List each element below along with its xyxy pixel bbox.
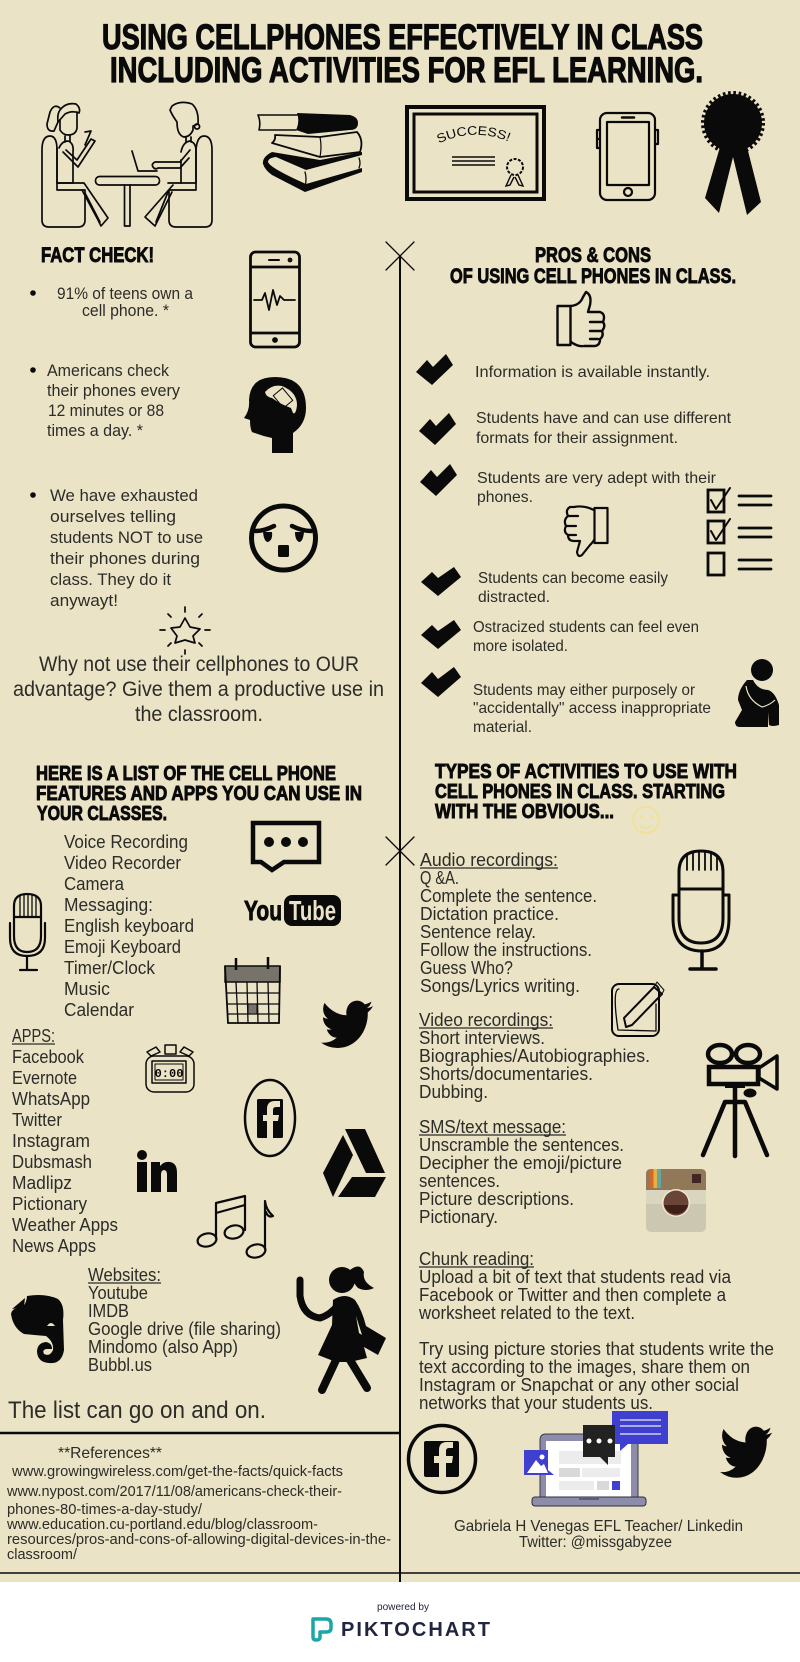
heading: pros and cons: PROS & CONS [535,244,651,267]
text: features list: Calendar [64,1000,134,1020]
text: apps list [12,1026,118,1256]
text: audio recordings: Sentence relay. [420,922,536,942]
text: picture stories [419,1339,774,1413]
text: picture stories: Try using picture stories that students write the [419,1339,774,1359]
text: references: resources/pros-and-cons-of-allowing-digital-devices-in-the- [7,1531,391,1548]
heading: activities: CELL PHONES IN CLASS. STARTING [435,781,725,803]
text: sms activities: Decipher the emoji/picture [419,1153,622,1173]
heading: feature list [36,763,362,825]
icon: calendar sketch [225,957,280,1023]
icon: twitter bird [321,1001,373,1048]
fact: teens own phones: 91% of teens own a [57,284,193,303]
callout: why not use [13,653,384,726]
heading: feature list: FEATURES AND APPS YOU CAN USE IN [36,783,362,805]
text: sms activities: Pictionary. [419,1207,498,1227]
text: websites list: Websites: [88,1265,161,1285]
text: apps list: Twitter [12,1110,62,1130]
text: sms activities: sentences. [419,1171,500,1191]
icon: phone with pulse [250,252,300,347]
icon: small microphone [10,894,45,970]
text: features list: Timer/Clock [64,958,156,978]
icon: google drive [323,1129,386,1197]
footer: powered by piktochart [313,1602,490,1641]
text: chunk reading: worksheet related to the text. [418,1303,635,1323]
text: audio recordings: Guess Who? [420,958,513,978]
fact: exhausted: anywayt! [50,591,118,610]
text: apps list: WhatsApp [12,1089,90,1109]
text: cons list: Students may either purposely or [473,682,696,699]
heading: activities [435,761,737,823]
icon: shining star [160,607,210,654]
icon: head with phone [244,377,306,453]
text: references: www.growingwireless.com/get-the-facts/quick-facts [11,1463,343,1480]
fact: exhausted: ourselves telling [50,507,176,526]
title [102,18,703,90]
icon: instagram camera [646,1169,706,1232]
text: sms activities: Unscramble the sentences. [419,1135,624,1155]
icon: laptop with chat bubbles [524,1411,668,1506]
icon: youtube logo [244,895,341,926]
callout: why not use: the classroom. [135,703,263,726]
text: apps list: APPS: [12,1026,55,1046]
text: audio recordings: Audio recordings: [420,850,558,870]
text: the list can go on: The list can go on and on. [8,1397,266,1424]
fact: exhausted: their phones during [50,549,200,568]
text: cons list: Ostracized students can feel even [473,619,699,636]
text: features list: Voice Recording [64,832,188,852]
icon: twitter bird bottom [720,1427,772,1478]
icon: success certificate: SUCCESS! [437,126,510,142]
icon: award ribbon [703,93,763,215]
fact: exhausted: class. They do it [50,570,171,589]
icon: large microphone [673,851,729,969]
text: chunk reading: Chunk reading: [419,1249,534,1269]
text: cons list: distracted. [478,589,550,606]
text: pros list: Students have and can use different [476,410,732,427]
text: apps list: Dubsmash [12,1152,92,1172]
footer: powered by piktochart: PIKTOCHART [341,1619,490,1641]
icon: crossed lines top [386,242,414,270]
text: references: phones-80-times-a-day-study/ [7,1501,203,1518]
icon: notepad and pencil [612,982,664,1036]
heading: feature list: HERE IS A LIST OF THE CELL PHONE [36,763,336,785]
text: audio recordings: Q &A. [420,868,459,888]
fact: teens own phones [30,284,193,320]
icon: faint yellow smiley [633,807,659,833]
text: sms activities [419,1117,624,1227]
text: pros list: Information is available instantly. [475,364,710,381]
text: video recordings: Shorts/documentaries. [419,1064,593,1084]
text: author credit [454,1518,743,1551]
footer: powered by piktochart: powered by [377,1602,429,1613]
text: author credit: Gabriela H Venegas EFL Teacher/ Linkedin [454,1518,743,1535]
text: features list: Music [64,979,110,999]
text: apps list: News Apps [12,1236,96,1256]
icon: youtube logo: You [244,895,282,926]
fact: exhausted: We have exhausted [50,486,198,505]
icon: two people at a table [42,102,212,227]
text: audio recordings: Songs/Lyrics writing. [420,976,580,996]
icon: timer: 0:00 [155,1067,183,1081]
text: chunk reading: Upload a bit of text that students read via [419,1267,732,1287]
icon: check marks [416,354,461,697]
text: cons list: material. [473,719,532,736]
text: apps list: Evernote [12,1068,77,1088]
fact: exhausted [30,486,203,610]
text: references: **References** [58,1445,162,1462]
text: websites list: Bubbl.us [88,1355,152,1375]
fact: americans check: their phones every [47,381,180,400]
text: features list: English keyboard [64,916,194,936]
text: pros list: formats for their assignment. [476,430,678,447]
text: apps list: Weather Apps [12,1215,118,1235]
heading: activities: TYPES OF ACTIVITIES TO USE WITH [435,761,737,783]
icon: chat bubble [253,823,319,870]
text: websites list [88,1265,281,1375]
text: sms activities: SMS/text message: [419,1117,566,1137]
icon: evernote elephant [11,1295,64,1363]
text: features list: Messaging: [64,895,153,915]
heading: activities: WITH THE OBVIOUS... [435,801,614,823]
text: websites list: Mindomo (also App) [88,1337,238,1357]
text: cons list [473,570,711,736]
text: picture stories: Instagram or Snapchat or any other social [419,1375,739,1395]
text: chunk reading: Facebook or Twitter and then complete a [419,1285,727,1305]
heading: feature list: YOUR CLASSES. [37,803,167,825]
icon: tired emoji [252,506,316,570]
icon: movie camera on tripod [703,1045,777,1156]
text: audio recordings [420,850,597,996]
icon: thumbs down [565,506,608,556]
fact: teens own phones: cell phone. * [82,301,169,320]
icon: success certificate [405,105,546,201]
text: pros list: phones. [477,489,533,506]
text: audio recordings: Complete the sentence. [420,886,597,906]
text: websites list: Youtube [88,1283,148,1303]
icon: checklist [708,488,771,575]
text: features list: Camera [64,874,125,894]
callout: why not use: advantage? Give them a productive use in [13,678,384,701]
icon: thumbs up [558,292,604,346]
icon: facebook oval [245,1080,295,1156]
text: apps list: Madlipz [12,1173,72,1193]
heading: fact check: FACT CHECK! [41,244,154,267]
text: pros list [475,364,732,506]
text: chunk reading [418,1249,732,1323]
text: features list: Video Recorder [64,853,181,873]
text: references: www.nypost.com/2017/11/08/americans-check-their- [6,1483,342,1500]
text: video recordings: Short interviews. [419,1028,545,1048]
text: apps list: Pictionary [12,1194,87,1214]
text: features list [64,832,194,1020]
text: picture stories: text according to the images, share them on [419,1357,750,1377]
text: picture stories: networks that your students us. [419,1393,653,1413]
text: references [6,1445,391,1563]
text: websites list: Google drive (file sharing) [88,1319,281,1339]
text: video recordings: Biographies/Autobiographies. [419,1046,650,1066]
text: apps list: Facebook [12,1047,85,1067]
text: author credit: Twitter: @missgabyzee [519,1534,672,1551]
icon: youtube logo: Tube [289,895,336,926]
fact: exhausted: students NOT to use [50,528,203,547]
icon: linkedin in [137,1150,177,1192]
icon: music notes [196,1196,273,1259]
text: audio recordings: Follow the instructions. [420,940,592,960]
icon: smartphone [597,113,658,200]
icon: crossed lines middle [386,837,414,865]
text: video recordings: Dubbing. [419,1082,488,1102]
icon: facebook circle [408,1426,476,1492]
fact: americans check [30,361,180,440]
text: features list: Emoji Keyboard [64,937,181,957]
icon: sitting sad person [735,659,779,727]
text: sms activities: Picture descriptions. [419,1189,574,1209]
text: references: classroom/ [7,1546,78,1563]
text: cons list: Students can become easily [478,570,668,587]
callout: why not use: Why not use their cellphones to OUR [39,653,359,676]
fact: americans check: times a day. * [47,421,143,440]
text: cons list: "accidentally" access inappropriate [473,700,711,717]
icon: girl with bag and phone [300,1266,386,1390]
text: apps list: Instagram [12,1131,90,1151]
text: pros list: Students are very adept with their [477,470,717,487]
text: video recordings: Video recordings: [419,1010,553,1030]
text: audio recordings: Dictation practice. [420,904,559,924]
fact: americans check: 12 minutes or 88 [48,401,164,420]
text: video recordings [419,1010,650,1102]
icon: timer [146,1045,194,1092]
heading: pros and cons [450,244,736,288]
text: cons list: more isolated. [473,638,568,655]
text: references: www.education.cu-portland.edu/blog/classroom- [6,1516,318,1533]
icon: books [258,113,362,192]
text: websites list: IMDB [88,1301,129,1321]
fact: americans check: Americans check [47,361,169,380]
